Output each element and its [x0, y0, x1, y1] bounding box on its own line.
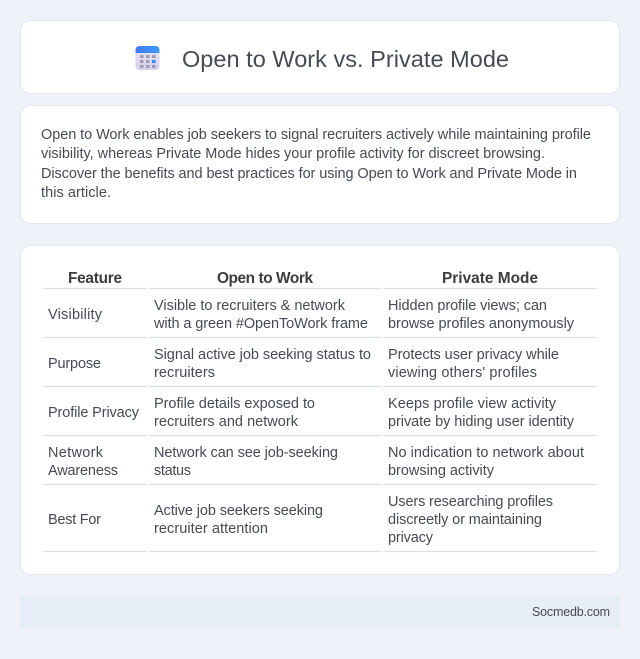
- row: network awareness: Network: [48, 445, 104, 461]
- row: best for: privacy: [388, 530, 434, 546]
- text block: introduction: this article.: [41, 185, 111, 201]
- row: best for: Active job seekers seeking: [154, 503, 323, 519]
- icon: calendar: [136, 46, 160, 70]
- row: best for: Users researching profiles: [388, 494, 553, 510]
- row: visibility: Visible to recruiters & network: [154, 298, 346, 314]
- row: visibility: [48, 298, 575, 332]
- text block: introduction: visibility, whereas Private Mode hides your profile activity for discreet browsing.: [41, 146, 545, 162]
- text block: introduction: Discover the benefits and best practices for using Open to Work and Private Mode in: [41, 166, 577, 182]
- row: network awareness: Awareness: [48, 463, 118, 479]
- text block: introduction: [41, 127, 591, 201]
- row: network awareness: browsing activity: [388, 463, 495, 479]
- row: profile privacy: Keeps profile view activity: [388, 396, 557, 412]
- row: profile privacy: [48, 396, 575, 430]
- row: best for: recruiter attention: [154, 521, 268, 537]
- panel: intro text: [20, 106, 620, 224]
- row: purpose: Signal active job seeking status to: [154, 347, 371, 363]
- row: purpose: Protects user privacy while: [388, 347, 559, 363]
- row: purpose: viewing others' profiles: [388, 365, 537, 381]
- row: profile privacy: Profile Privacy: [48, 405, 140, 421]
- row: network awareness: status: [154, 463, 191, 479]
- footer: [20, 595, 620, 629]
- row: visibility: Visibility: [48, 307, 103, 323]
- table header row: Feature: [68, 270, 122, 287]
- row: visibility: with a green #OpenToWork frame: [153, 316, 368, 332]
- table header row: [68, 270, 538, 287]
- row: best for: discreetly or maintaining: [388, 512, 542, 528]
- row: network awareness: [48, 445, 584, 479]
- panel: header: [20, 20, 620, 94]
- footer credit: Socmedb.com: [532, 605, 610, 619]
- row: profile privacy: recruiters and network: [154, 414, 299, 430]
- title: Open to Work vs. Private Mode: [182, 46, 509, 72]
- row: profile privacy: Profile details exposed to: [154, 396, 315, 412]
- row: purpose: Purpose: [48, 356, 101, 372]
- table header row: Open to Work: [217, 270, 313, 287]
- row: visibility: browse profiles anonymously: [388, 316, 575, 332]
- row: purpose: [48, 347, 559, 381]
- row: best for: [48, 494, 553, 546]
- text block: introduction: Open to Work enables job seekers to signal recruiters actively while maintaining profile: [41, 127, 591, 143]
- row: best for: Best For: [48, 512, 101, 528]
- row: visibility: Hidden profile views; can: [388, 298, 547, 314]
- panel: comparison table: [20, 246, 620, 574]
- row: purpose: recruiters: [154, 365, 215, 381]
- table header row: Private Mode: [442, 270, 538, 287]
- row: network awareness: Network can see job-seeking: [154, 445, 338, 461]
- row: profile privacy: private by hiding user identity: [388, 414, 575, 430]
- row: network awareness: No indication to network about: [388, 445, 584, 461]
